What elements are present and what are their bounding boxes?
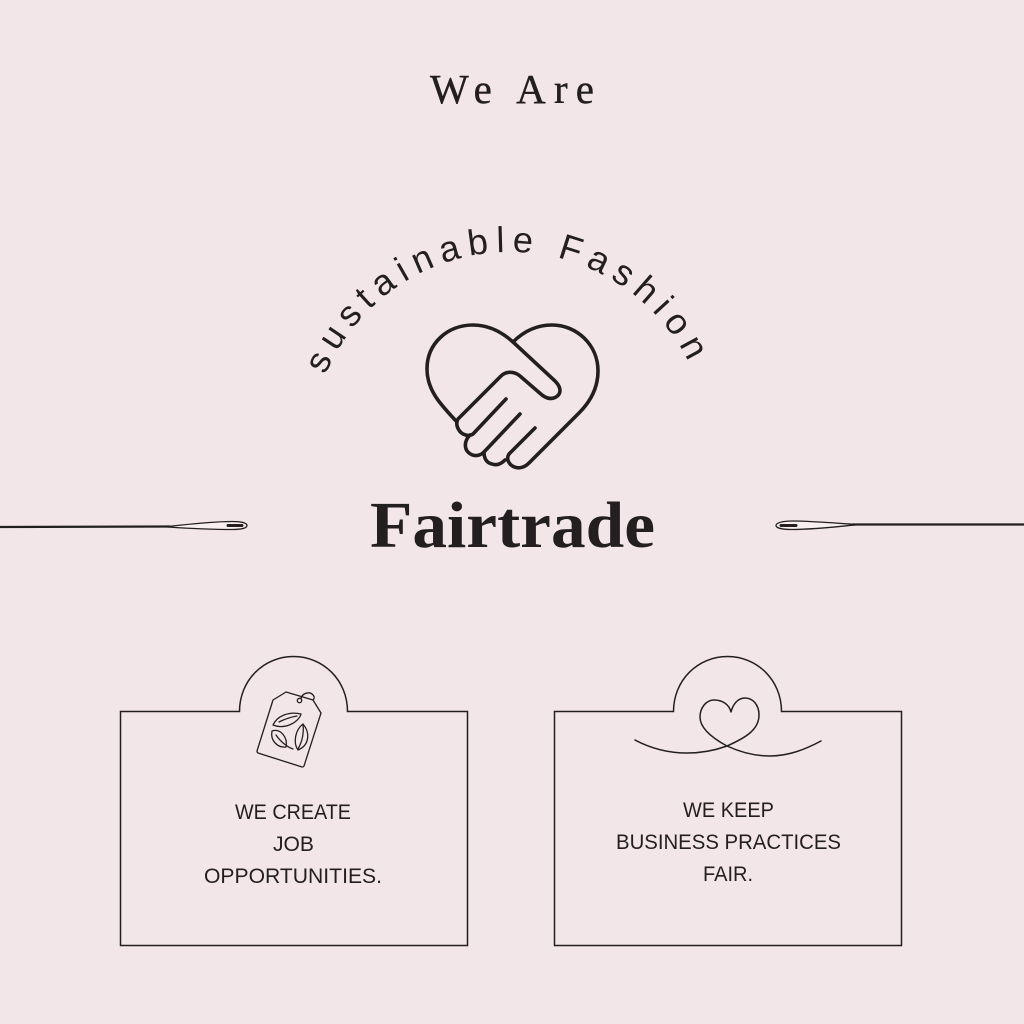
text: we keep business practices fair (616, 799, 841, 886)
text: we create job opportunities: OPPORTUNITIES. (204, 865, 382, 888)
text: we create job opportunities: WE CREATE (235, 801, 351, 824)
heading: We Are: We Are (430, 66, 594, 112)
text: we keep business practices fair: BUSINESS PRACTICES (616, 831, 841, 854)
panel: job opportunities (120, 656, 468, 946)
icon: clothing tag with leaves (257, 692, 321, 767)
icon: handshake heart (427, 325, 598, 468)
card outline with arch (554, 656, 902, 946)
icon: thread heart (635, 698, 821, 756)
curved heading: sustainable Fashion: sustainable Fashion (310, 226, 702, 372)
text: we create job opportunities: JOB (273, 833, 314, 856)
text: we keep business practices fair: WE KEEP (683, 799, 774, 822)
heading: Fairtrade: Fairtrade (370, 489, 655, 562)
panel: fair business practices (554, 656, 902, 946)
text: we create job opportunities (204, 801, 382, 888)
text: we keep business practices fair: FAIR. (703, 863, 753, 886)
card outline with arch (120, 656, 468, 946)
icon: left needle and thread (0, 522, 247, 530)
icon: right needle and thread (776, 521, 1024, 530)
